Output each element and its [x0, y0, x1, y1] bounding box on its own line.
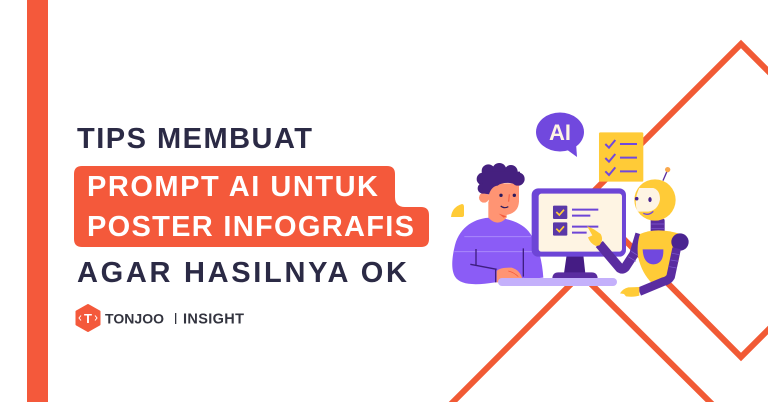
icon: hexagon logo mark [76, 305, 100, 331]
sweater [452, 218, 543, 284]
monitor frame [532, 188, 626, 257]
robot pocket [643, 249, 663, 264]
icon: AI speech bubble [536, 112, 584, 157]
person [452, 163, 543, 284]
highlighted title block [74, 166, 429, 247]
icon: AI speech bubble: AI [549, 120, 571, 145]
neck [488, 202, 507, 223]
logo divider [175, 313, 176, 324]
robot neck [651, 219, 665, 233]
zigzag outline lower [447, 274, 716, 402]
robot pointing hand [587, 226, 602, 246]
title line 2: PROMPT AI UNTUK [87, 171, 378, 203]
robot near arm [639, 248, 677, 292]
hand [497, 268, 522, 282]
face [488, 183, 519, 215]
icon: yellow leaf [451, 204, 464, 217]
ear [479, 193, 489, 203]
icon: checklist note [599, 132, 643, 182]
zigzag outline upper [585, 44, 768, 357]
robot shoulder [671, 233, 689, 251]
eyes [499, 194, 503, 197]
robot [587, 167, 689, 297]
title line 4: AGAR HASILNYA OK [77, 257, 407, 289]
left accent bar [27, 0, 48, 402]
highlight shape [74, 166, 429, 247]
title line 1: TIPS MEMBUAT [77, 123, 312, 155]
screen checklist [553, 206, 598, 236]
monitor base [552, 272, 598, 278]
keyboard [498, 278, 617, 286]
robot antenna [663, 171, 667, 181]
robot body [638, 230, 681, 284]
robot head [634, 179, 676, 221]
robot far arm [599, 234, 640, 269]
monitor screen [539, 194, 622, 252]
title line 3: POSTER INFOGRAFIS [87, 211, 414, 243]
section name: INSIGHT [183, 312, 244, 328]
logo wordmark: TONJOO [105, 310, 164, 326]
nose [507, 194, 511, 202]
computer monitor [532, 188, 626, 278]
hair [477, 163, 525, 194]
logo [76, 305, 244, 331]
robot near hand [620, 287, 639, 297]
icon: hexagon logo mark: T [84, 311, 92, 326]
monitor stand [564, 255, 585, 273]
robot face [636, 188, 660, 212]
smile [501, 206, 508, 208]
